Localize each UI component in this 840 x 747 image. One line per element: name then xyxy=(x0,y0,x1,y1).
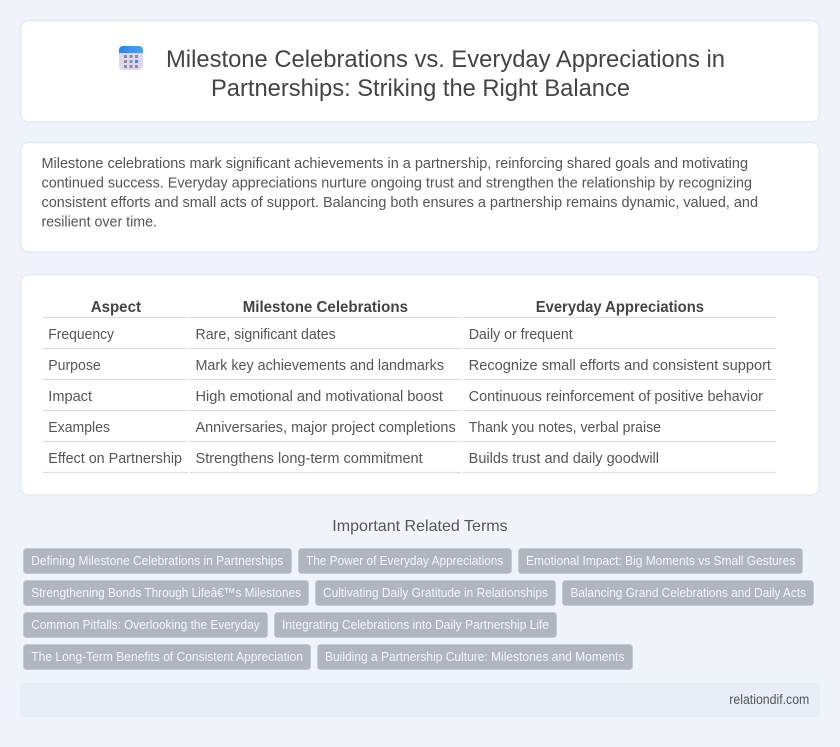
chip: common pitfalls xyxy=(24,612,268,638)
chip: emotional impact xyxy=(518,548,802,574)
table row: examples: Thank you notes, verbal praise xyxy=(469,420,661,436)
table row: impact: Continuous reinforcement of positive behavior xyxy=(469,389,763,405)
chip: balancing grand celebrations: Balancing Grand Celebrations and Daily Acts xyxy=(570,585,806,600)
text block: introduction paragraph: resilient over time. xyxy=(42,214,157,230)
table row: impact: High emotional and motivational boost xyxy=(196,389,443,405)
heading: title xyxy=(166,46,725,102)
table row: examples: Anniversaries, major project completions xyxy=(196,420,456,436)
text block: introduction paragraph: Milestone celebrations mark significant achievements in a partnership, reinforcing shared goals and motivating xyxy=(42,156,748,172)
chip: strengthening bonds: Strengthening Bonds Through Lifeâ€™s Milestones xyxy=(31,585,301,600)
chip: power of everyday appreciations xyxy=(298,548,512,574)
table row: effect on partnership: Strengthens long-term commitment xyxy=(196,451,423,467)
chip: integrating celebrations: Integrating Celebrations into Daily Partnership Life xyxy=(282,617,549,632)
footer bar xyxy=(20,683,820,717)
text block: introduction paragraph: continued success. Everyday appreciations nurture ongoing trust and strengthen the relationship by recognizing xyxy=(42,176,752,192)
panel: comparison table xyxy=(20,274,820,495)
chip: common pitfalls: Common Pitfalls: Overlooking the Everyday xyxy=(31,617,260,632)
table row: effect on partnership: Builds trust and daily goodwill xyxy=(469,451,659,467)
table row: purpose xyxy=(43,358,776,380)
icon: calendar xyxy=(119,46,143,70)
chip: defining milestone celebrations xyxy=(24,548,292,574)
panel: introduction xyxy=(20,142,820,252)
heading: important related terms: Important Related Terms xyxy=(332,518,508,535)
chip: building a partnership culture xyxy=(318,644,632,670)
table row: examples: Examples xyxy=(48,420,110,436)
table row: impact xyxy=(43,389,776,410)
table row: impact: Impact xyxy=(48,389,92,405)
chip: power of everyday appreciations: The Power of Everyday Appreciations xyxy=(306,553,503,568)
chip: cultivating daily gratitude: Cultivating Daily Gratitude in Relationships xyxy=(323,585,548,600)
related terms chips xyxy=(24,548,814,670)
chip: long-term benefits xyxy=(24,644,310,670)
text block: introduction paragraph xyxy=(42,156,758,230)
panel: title header xyxy=(20,20,820,122)
table row: effect on partnership xyxy=(43,451,776,472)
chip: long-term benefits: The Long-Term Benefits of Consistent Appreciation xyxy=(31,649,303,664)
table header row: Everyday Appreciations xyxy=(536,299,704,316)
table row: purpose: Purpose xyxy=(48,358,101,374)
chip: strengthening bonds xyxy=(24,580,308,606)
heading: title: Partnerships: Striking the Right Balance xyxy=(211,75,630,102)
chip: integrating celebrations xyxy=(274,612,556,638)
table header row: Milestone Celebrations xyxy=(243,299,408,316)
chip: balancing grand celebrations xyxy=(562,580,814,606)
table row: examples xyxy=(43,420,776,442)
chip: cultivating daily gratitude xyxy=(316,580,556,606)
heading: title: Milestone Celebrations vs. Everyday Appreciations in xyxy=(166,46,725,73)
chip: defining milestone celebrations: Defining Milestone Celebrations in Partnerships xyxy=(31,553,283,568)
table header row xyxy=(43,299,776,318)
text block: introduction paragraph: consistent efforts and small acts of support. Balancing both ensures a partnership remains dynamic, valued, and xyxy=(42,195,758,211)
table row: frequency: Daily or frequent xyxy=(469,327,573,343)
footer bar: relationdif.com xyxy=(729,692,809,707)
table header row: Aspect xyxy=(91,299,141,316)
chip: emotional impact: Emotional Impact: Big Moments vs Small Gestures xyxy=(526,553,795,568)
table row: purpose: Recognize small efforts and consistent support xyxy=(469,358,771,374)
table row: frequency xyxy=(43,327,776,348)
table row: effect on partnership: Effect on Partnership xyxy=(48,451,182,467)
table row: frequency: Frequency xyxy=(48,327,115,343)
chip: building a partnership culture: Building a Partnership Culture: Milestones and Moments xyxy=(325,649,624,664)
table row: purpose: Mark key achievements and landmarks xyxy=(196,358,444,374)
table row: frequency: Rare, significant dates xyxy=(196,327,336,343)
